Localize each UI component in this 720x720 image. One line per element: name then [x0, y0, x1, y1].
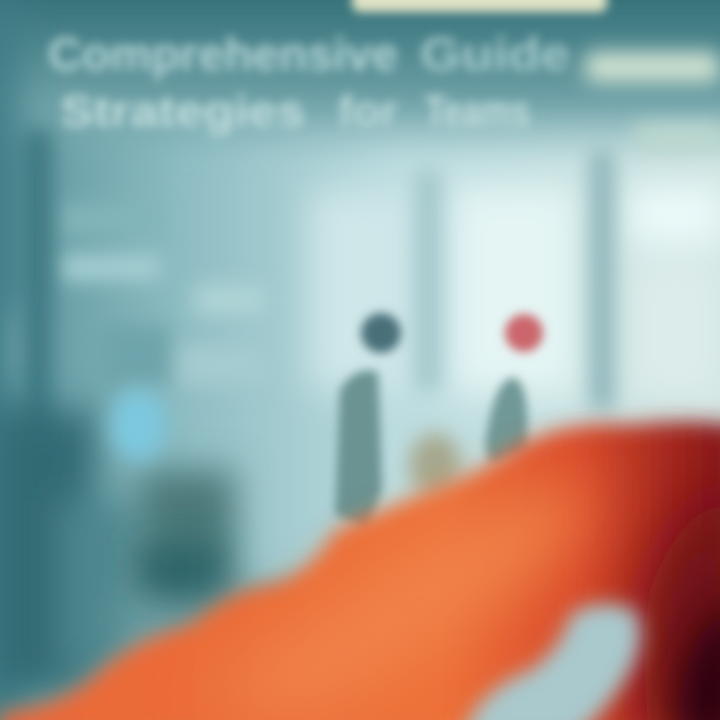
- title: Strategies: [60, 87, 305, 136]
- left dark edge: [0, 0, 18, 720]
- dark red corner: [645, 470, 720, 720]
- figure between: [409, 433, 461, 497]
- pale blue blob: [465, 604, 641, 720]
- lighter orange highlight: [200, 480, 600, 720]
- orange wave: [0, 422, 720, 720]
- lower left dark furniture: [0, 410, 310, 690]
- title: for: [338, 87, 398, 136]
- title: Guide: [420, 28, 570, 80]
- light blue screen: [110, 389, 166, 461]
- person left: [335, 313, 401, 530]
- top highlight: [352, 0, 607, 12]
- top header band: [0, 0, 720, 160]
- bright windows: [0, 185, 720, 400]
- person right: [485, 314, 543, 465]
- title: Teams: [425, 87, 530, 136]
- top right highlights: [585, 52, 720, 150]
- wall details: [60, 205, 270, 385]
- deep red shade: [679, 590, 720, 720]
- title: Comprehensive: [48, 28, 398, 80]
- title: [48, 28, 570, 136]
- window columns: [22, 130, 614, 450]
- dark furniture core: [140, 545, 220, 595]
